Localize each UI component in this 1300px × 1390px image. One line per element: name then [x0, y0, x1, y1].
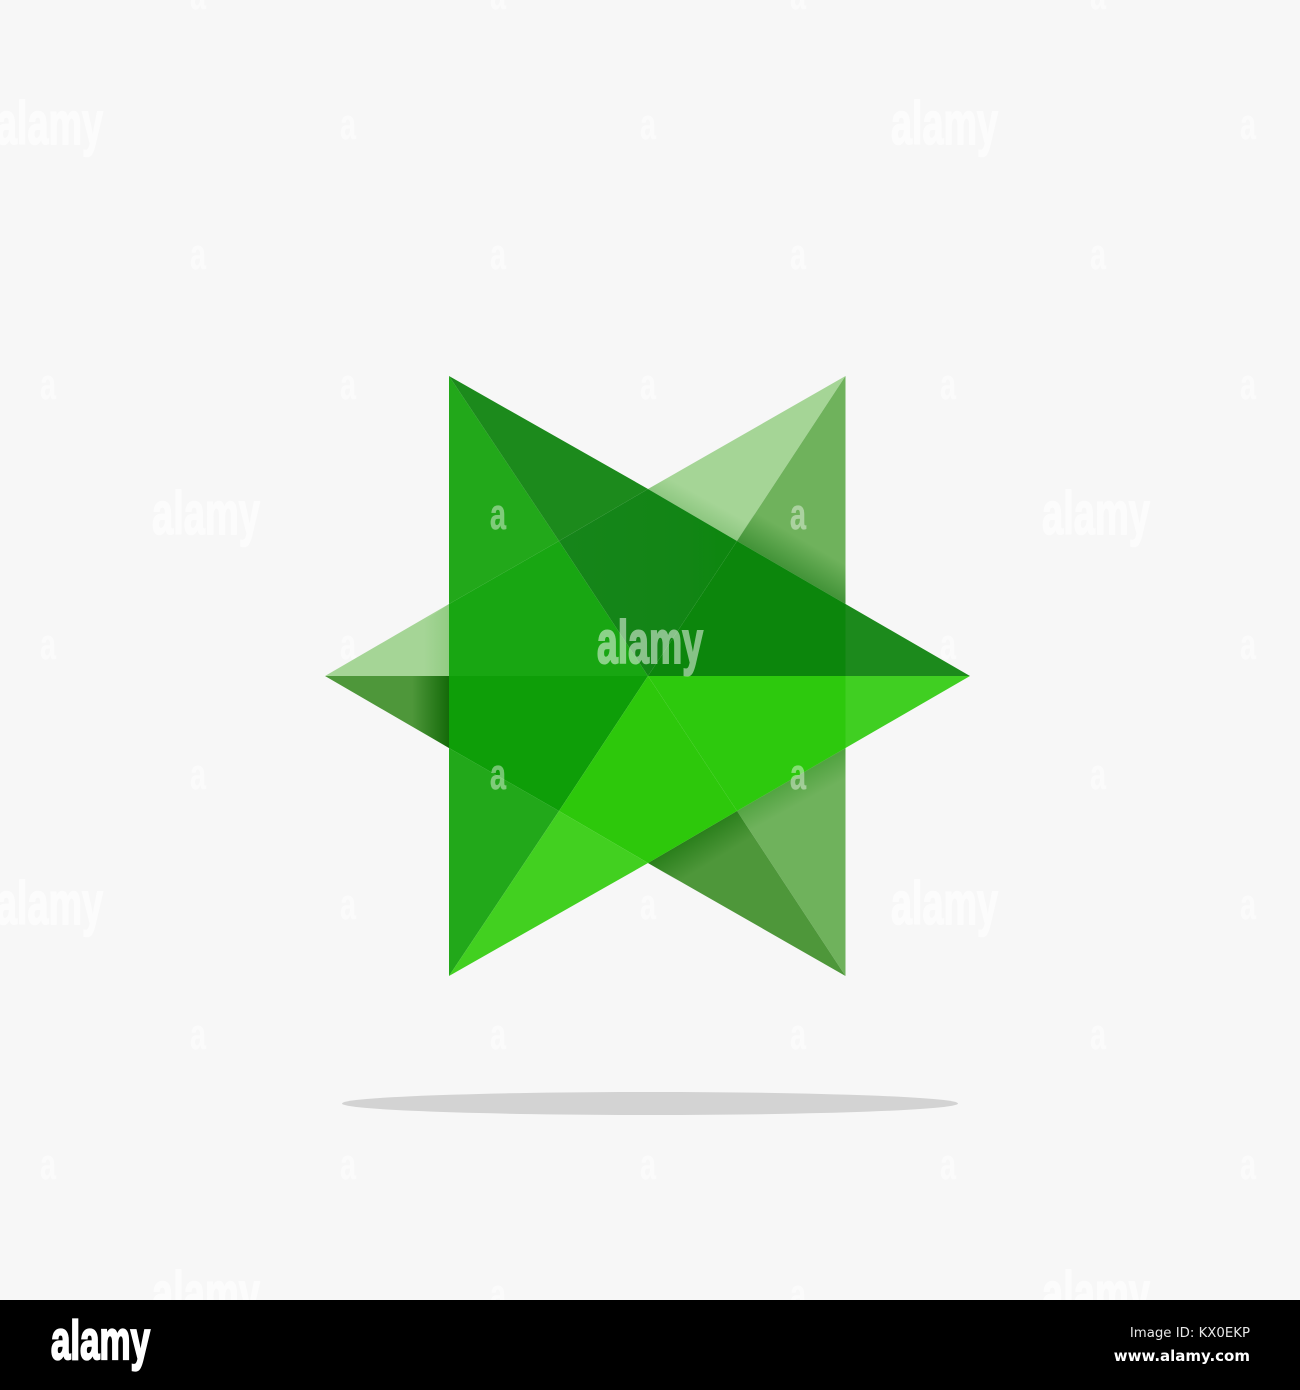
background watermarks: a	[490, 230, 506, 279]
background watermarks: a	[940, 1140, 956, 1189]
background watermarks: a	[190, 750, 206, 799]
background watermarks: alamy	[152, 1260, 260, 1327]
background watermarks: a	[640, 100, 656, 149]
background watermarks: a	[1240, 880, 1256, 929]
front left face overlaps	[449, 541, 648, 811]
background watermarks: a	[490, 1010, 506, 1059]
background watermarks: a	[1090, 750, 1106, 799]
watermarks over the star: a	[790, 490, 806, 539]
background watermarks: a	[790, 1270, 806, 1319]
footer bar	[0, 1300, 1300, 1390]
front triangle: top face	[449, 376, 970, 676]
background watermarks: a	[1090, 230, 1106, 279]
ground shadow	[342, 1092, 958, 1115]
background watermarks: a	[640, 360, 656, 409]
background watermarks: a	[40, 360, 56, 409]
background watermarks: a	[640, 880, 656, 929]
background watermarks: a	[790, 1010, 806, 1059]
background watermarks: a	[640, 1140, 656, 1189]
background watermarks: a	[340, 1140, 356, 1189]
background watermarks: a	[340, 880, 356, 929]
background watermarks: alamy	[1042, 1260, 1150, 1327]
background watermarks: a	[940, 360, 956, 409]
background watermarks: a	[40, 1140, 56, 1189]
background watermarks: alamy	[0, 870, 103, 937]
background watermarks: a	[190, 1010, 206, 1059]
front triangle: left face	[449, 376, 559, 976]
background watermarks: a	[190, 230, 206, 279]
background watermarks: a	[1240, 360, 1256, 409]
front triangle: bottom face	[449, 676, 970, 976]
watermarks over the star: alamy	[597, 609, 703, 676]
back triangle: bottom face spikes	[325, 676, 846, 976]
background watermarks: a	[340, 360, 356, 409]
background watermarks: a	[1240, 1140, 1256, 1189]
background watermarks: alamy	[1042, 480, 1150, 547]
star graphic	[325, 376, 970, 976]
background watermarks: alamy	[891, 90, 998, 157]
footer logo: alamy	[51, 1309, 150, 1371]
watermarks over the star: a	[790, 750, 806, 799]
back triangle: right face spikes	[737, 376, 846, 976]
watermarks over the star	[490, 490, 806, 799]
background watermarks: a	[940, 620, 956, 669]
background watermarks: a	[790, 230, 806, 279]
watermarks over the star: a	[490, 750, 506, 799]
background watermarks: alamy	[0, 90, 103, 157]
background watermarks: a	[1240, 620, 1256, 669]
back triangle: top face spikes	[325, 376, 846, 676]
background watermarks: a	[340, 100, 356, 149]
background watermarks: a	[40, 620, 56, 669]
background watermarks: alamy	[891, 870, 998, 937]
background watermarks: a	[1090, 1010, 1106, 1059]
image id: Image ID: KX0EKP	[1130, 1326, 1250, 1341]
background watermarks: a	[340, 620, 356, 669]
website: www.alamy.com	[1114, 1347, 1250, 1365]
background watermarks: a	[1240, 100, 1256, 149]
cast shadows on the back triangle	[412, 464, 846, 882]
watermarks over the star: a	[490, 490, 506, 539]
background watermarks: alamy	[152, 480, 260, 547]
background watermarks: a	[490, 1270, 506, 1319]
